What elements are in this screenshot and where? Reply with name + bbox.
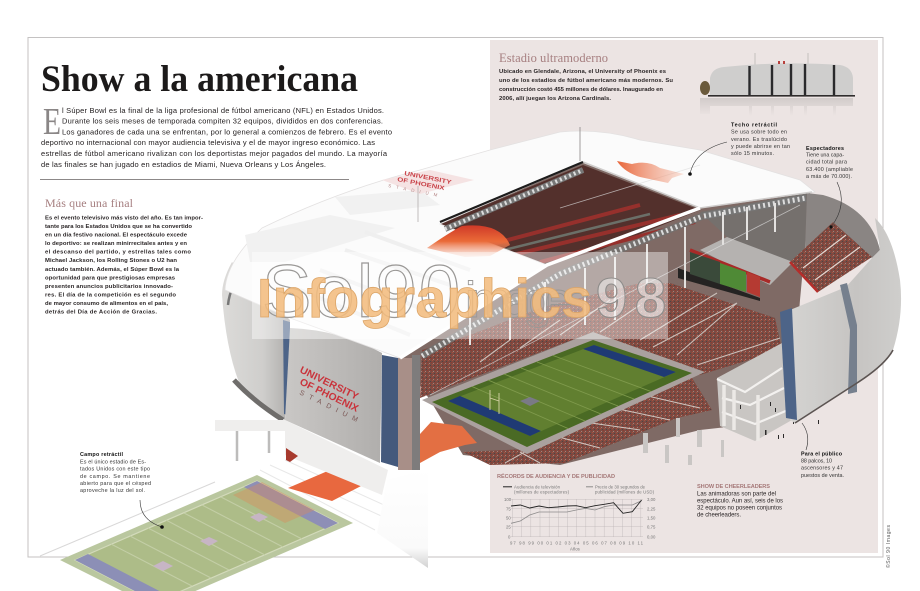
slab columns: [237, 431, 269, 461]
right axis labels: [647, 497, 656, 540]
body text: 2006, allí juegan los Arizona Cardinals.: [499, 96, 611, 102]
front stands: [463, 378, 712, 465]
image credit: ©Sol 90 Images: [885, 524, 892, 568]
front stand aisles: [505, 392, 700, 463]
watermark sol90: Sol90: [262, 250, 460, 333]
red barrier: [790, 262, 818, 292]
body text: Es el evento televisivo más visto del año. Es tan impor-: [45, 215, 203, 221]
sign line 2: OF PHOENIX: [298, 377, 360, 415]
upper truss: [445, 170, 583, 229]
lower left slab: [215, 420, 285, 431]
body text: res. El día de la competición es el segundo: [45, 292, 176, 298]
left axis labels: [504, 497, 512, 540]
section: más que una final: [45, 196, 203, 316]
callout text: sólo 15 minutos.: [731, 151, 774, 157]
floor slabs: [717, 368, 788, 424]
wall base band: [234, 380, 283, 420]
white edge beam: [400, 208, 700, 358]
antennas: [755, 53, 808, 66]
body text: presenten anuncios publicitarios innovado-: [45, 284, 173, 290]
sign background: [382, 170, 474, 194]
lower stands: [420, 283, 782, 398]
chart: récords de audiencia y de publicidad: [497, 472, 656, 552]
base slab outline: [40, 482, 215, 556]
public: [740, 402, 819, 439]
red barrier: [690, 250, 770, 282]
legend: price: [586, 484, 655, 494]
legend: audience: [503, 484, 570, 494]
goal post: [490, 390, 499, 414]
right truss: [704, 198, 806, 216]
right axis labels: 1,50: [647, 516, 656, 520]
body text: de mayor consumo de alimentos en el país,: [45, 301, 168, 307]
field outer: [432, 340, 692, 447]
yard lines: [472, 356, 651, 428]
watermark: [252, 250, 668, 339]
front entrance block: [285, 328, 477, 495]
callout text: cidad total para: [806, 160, 847, 166]
dark red inset: [286, 448, 298, 462]
chart title: RÉCORDS DE AUDIENCIA Y DE PUBLICIDAD: [497, 472, 615, 480]
stadium side view: [710, 63, 853, 95]
body text: en un día festivo nacional. El espectáculo excede: [45, 232, 188, 238]
right end zone: [583, 345, 676, 377]
small stadium elevation: [700, 53, 855, 116]
audience line: [511, 500, 642, 513]
ground stripes: [260, 460, 395, 530]
callout text: Se usa sobre todo en: [731, 130, 787, 136]
center logo: [520, 397, 540, 406]
orange arrow: [420, 422, 477, 463]
black roof edge: [440, 162, 583, 222]
stadium bowl interior: [400, 163, 810, 465]
drop cap: E: [43, 101, 61, 143]
callout text: tados Unidos con este tipo: [80, 467, 150, 473]
sign line 3: STADIUM: [388, 183, 438, 198]
callout text: Es el único estadio de Es-: [80, 459, 146, 465]
leader dot: [829, 225, 833, 229]
legend: audience: (millones de espectadores): [514, 490, 570, 494]
top antenna: [579, 127, 581, 161]
intro paragraph: Los ganadores de cada una se enfrentan, por lo general a comienzos de febrero. Es el evento: [62, 127, 392, 136]
base line: [708, 95, 855, 97]
left end zone: [448, 396, 541, 436]
intro text block: [41, 101, 392, 169]
heading: Más que una final: [45, 196, 134, 210]
watermark infographics: Infographics: [257, 267, 592, 329]
callout text: abierto para que el césped: [80, 481, 151, 487]
trees: [700, 81, 710, 95]
leader dot: [688, 172, 692, 176]
right axis labels: 0,75: [647, 524, 656, 530]
field turf border: [60, 475, 353, 591]
watermark panel: [252, 252, 668, 339]
axis title: Años: [570, 546, 580, 552]
callout: campo retráctil: [80, 452, 164, 529]
callout text: Tiene una capa-: [806, 152, 844, 158]
roof panels: [245, 190, 440, 262]
left wall: [215, 262, 290, 461]
intro paragraph: deportivo no internacional con mayor audiencia televisiva y el de mayor ingreso económico. Las: [41, 138, 375, 147]
legend: price: publicidad (millones de USD): [595, 490, 655, 494]
field turf: [448, 345, 676, 436]
leader line: [140, 500, 162, 527]
callout: techo retráctil: [688, 122, 790, 176]
scoreboard: [678, 252, 760, 301]
left axis labels: 25: [506, 524, 511, 530]
left axis labels: 75: [506, 506, 511, 512]
upper stands behind roof opening: [440, 165, 700, 265]
year labels: 97 98 99 00 01 02 03 04 05 06 07 08 09 10 11: [510, 540, 644, 546]
right axis labels: 3,00: [647, 497, 656, 502]
body text: uno de los estadios de fútbol americano más modernos. Su: [499, 78, 673, 84]
steel frame: [398, 358, 412, 470]
pillars: [724, 385, 758, 441]
body text: [45, 215, 203, 316]
wall: [790, 218, 901, 423]
red mark: [778, 61, 785, 64]
orange arrow: roof left: [427, 225, 510, 257]
stadium sign: [298, 365, 360, 424]
watermark images: images: [465, 272, 590, 328]
body text: oportunidad para que prestigiosas empresas: [45, 275, 176, 281]
callout text: puestos de venta.: [801, 473, 844, 479]
leader line: [802, 423, 808, 450]
screen dark: [690, 252, 720, 284]
leader line: [831, 182, 841, 227]
callout text: 88 palcos, 10: [801, 458, 832, 464]
wall dark accent: [228, 272, 244, 305]
center logos: [153, 513, 268, 571]
main field: [432, 340, 692, 447]
lower stand aisles: [480, 293, 780, 365]
intro divider: [40, 179, 349, 180]
roof ribs: [300, 232, 470, 335]
callout text: [731, 130, 790, 157]
body text: [499, 69, 673, 102]
body text: Las animadoras son parte del: [697, 491, 776, 497]
intro paragraph: [41, 106, 392, 169]
body text: [697, 491, 783, 518]
body text: Michael Jackson, los Rolling Stones o U2 han: [45, 258, 177, 264]
body text: de cheerleaders.: [697, 512, 741, 518]
right truss lattice: [704, 198, 806, 216]
sign line 1: UNIVERSITY: [404, 171, 452, 186]
sign line 3: STADIUM: [298, 390, 359, 424]
dark stripes: [750, 64, 834, 95]
callout title: Techo retráctil: [731, 122, 778, 128]
upper seats: [790, 222, 872, 292]
upper truss lattice: [445, 170, 583, 229]
interior base: [400, 163, 810, 465]
callout: espectadores: [806, 146, 853, 229]
leader dot: [160, 525, 164, 529]
body text: espectáculo. Aun así, seis de los: [697, 498, 783, 504]
body text: 32 equipos no poseen conjuntos: [697, 506, 782, 512]
leader line: [690, 142, 727, 174]
intro paragraph: Durante los seis meses de temporada compiten 32 equipos, divididos en dos conferencias.: [62, 117, 383, 126]
left axis labels: 100: [504, 497, 512, 502]
callout text: a más de 70.000).: [806, 174, 852, 180]
section walls: [717, 343, 792, 441]
body text: construcción costó 455 millones de dólares. Inaugurado en: [499, 87, 663, 93]
right inner wall: [700, 193, 807, 263]
white front block: [377, 468, 428, 568]
main truss lattice: [422, 216, 703, 356]
orange fade on field: [233, 482, 315, 523]
retractable roof shadow line: [583, 162, 812, 208]
callout text: [801, 458, 844, 479]
callout text: y puede abrirse en tan: [731, 144, 790, 150]
body text: Ubicado en Glendale, Arizona, el University of Phoenix es: [499, 69, 667, 75]
aisles: [803, 235, 860, 280]
orange arrow: roof right: [617, 161, 684, 183]
second window strip: [840, 283, 857, 394]
concourse floor: [700, 237, 793, 285]
intro paragraph: estrellas de fútbol americano rivalizan con los deportistas mejor pagados del mundo. La mayoría: [41, 149, 388, 158]
callout: para el público: [801, 423, 844, 479]
retractable field orange track: [288, 470, 363, 501]
callout text: [806, 152, 853, 180]
body text: detrás del Día de Acción de Gracias.: [45, 310, 157, 316]
yard lines: [111, 497, 302, 586]
roof sign: [382, 170, 474, 198]
callout title: Campo retráctil: [80, 452, 124, 458]
truss posts: [470, 203, 775, 345]
callout text: verano. Es traslúcido: [731, 137, 787, 143]
right outer wall: [780, 218, 901, 423]
price line: [511, 501, 642, 523]
screen red: [747, 272, 760, 297]
support pillars: [643, 418, 724, 465]
body text: tante para los Estados Unidos que se ha convertido: [45, 224, 192, 230]
roof cables: [430, 165, 800, 395]
right axis labels: 2,25: [647, 506, 656, 512]
main truss: [422, 216, 703, 356]
sign line 1: UNIVERSITY: [298, 365, 360, 403]
callout text: de campo. Se mantiene: [80, 474, 150, 480]
left axis labels: 0: [508, 534, 511, 540]
section: show de cheerleaders: [697, 484, 783, 518]
window strip: [283, 320, 290, 416]
intro paragraph: de las finales se han jugado en estadios de Miami, Nueva Orleans y Los Ángeles.: [41, 160, 326, 169]
bottom end zone: [75, 554, 169, 591]
watermark 98: 98: [596, 266, 666, 329]
callout text: ascensores y 47: [801, 466, 843, 472]
left axis labels: 50: [506, 516, 511, 520]
cross-section concourses: [717, 343, 819, 441]
legend: audience: Audiencia de televisión: [514, 484, 561, 490]
right inner seating tier: [790, 193, 880, 292]
body text: lo deportivo: se realizan minirrecitales antes y en: [45, 241, 187, 247]
callout text: aproveche la luz del sol.: [80, 488, 145, 494]
legend: price: Precio de 30 segundos de: [595, 484, 646, 490]
panel: estadio ultramoderno background: [490, 40, 878, 553]
scoreboard strip: [678, 268, 760, 301]
reflection: [700, 98, 853, 116]
roof: [225, 127, 815, 395]
top end zone: [244, 481, 338, 529]
red bands: [470, 205, 695, 262]
heading: Estadio ultramoderno: [499, 51, 608, 65]
back wall: [805, 193, 880, 258]
callout text: [80, 459, 151, 494]
white roof shell: [225, 131, 815, 358]
sign line 2: OF PHOENIX: [397, 177, 445, 192]
roof mast: [417, 186, 419, 222]
intro paragraph: l Súper Bowl es la final de la liga profesional de fútbol americano (NFL) en Estados Unidos.: [62, 106, 384, 115]
gray column: [412, 355, 420, 470]
left field extended: [40, 460, 395, 591]
body text: actuado también. Además, el Súper Bowl es la: [45, 267, 180, 273]
section: estadio ultramoderno text: [499, 51, 673, 102]
curved wall: [222, 262, 290, 420]
white base: [285, 420, 388, 495]
callout title: Espectadores: [806, 146, 844, 152]
first window strip: [780, 308, 797, 420]
wall foot: [795, 350, 893, 423]
screen green: [720, 263, 746, 292]
grid: [511, 499, 643, 537]
gray facade: [285, 328, 382, 463]
field perimeter: [422, 332, 705, 454]
field inner: [75, 481, 338, 591]
window strip: [381, 355, 398, 467]
body text: el descanso del partido, y estrellas tales como: [45, 250, 191, 256]
gray band: [480, 214, 650, 256]
callout text: 63.400 (ampliable: [806, 167, 853, 173]
callout title: Para el público: [801, 452, 843, 458]
heading: SHOW DE CHEERLEADERS: [697, 484, 770, 490]
title: Show a la americana: [41, 58, 358, 99]
right axis labels: 0,00: [647, 534, 656, 540]
